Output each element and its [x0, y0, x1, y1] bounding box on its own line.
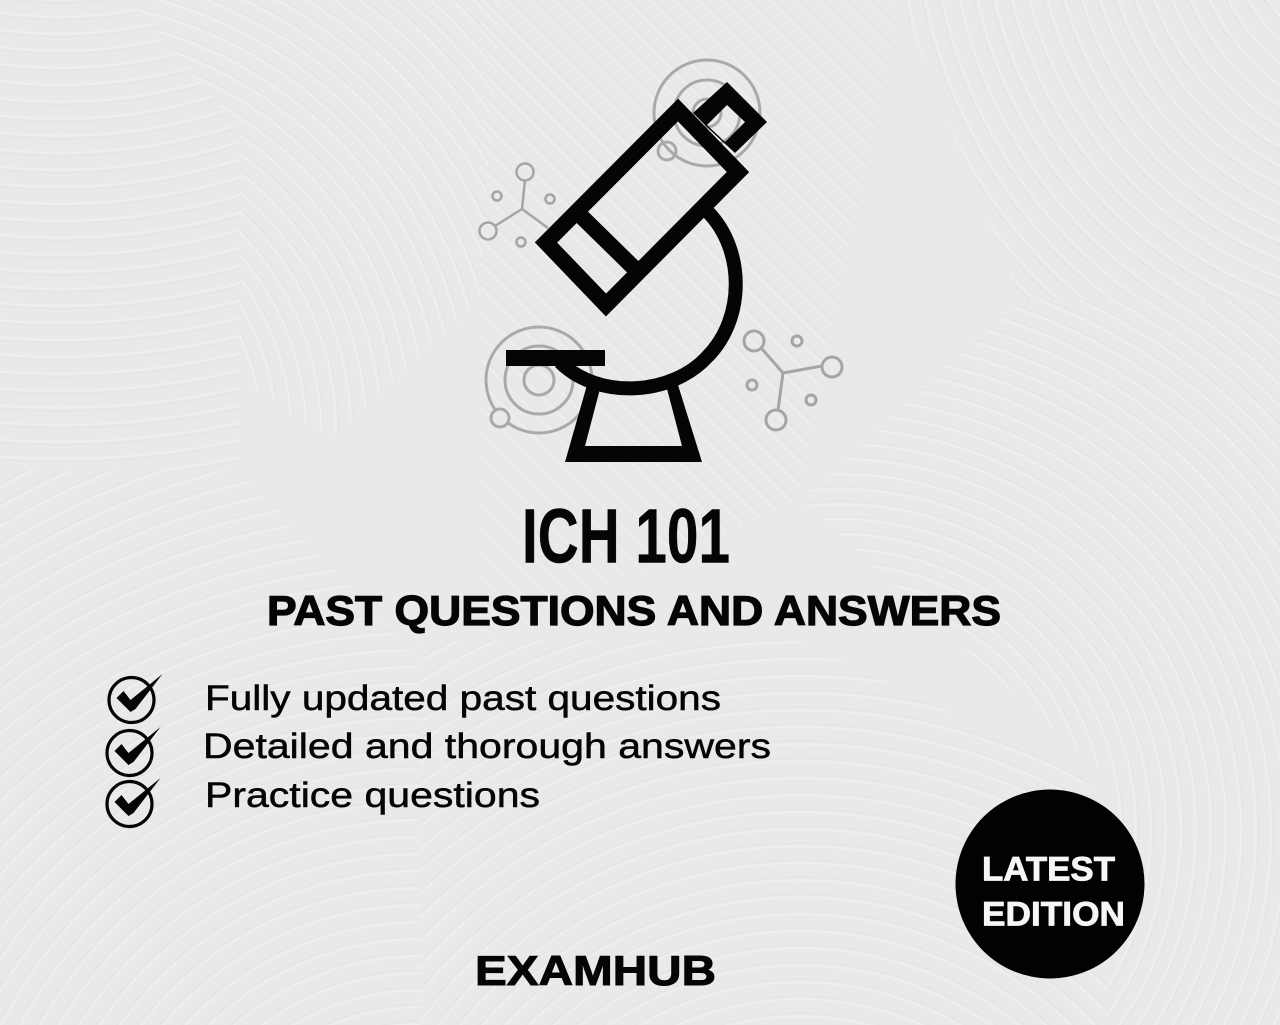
microscope tube: [546, 110, 738, 305]
brand name: EXAMHUB: [475, 947, 716, 994]
microscope base: [565, 385, 702, 462]
badge: latest edition: LATEST: [982, 850, 1115, 888]
badge: latest edition: EDITION: [982, 896, 1125, 934]
list item 1: Fully updated past questions: [205, 679, 721, 718]
decoration: top concentric rings: [654, 60, 760, 166]
decoration: right molecule: [744, 331, 842, 430]
icon: microscope with science decorations: [480, 60, 842, 462]
title: ICH 101: [522, 494, 730, 580]
icon: check 3: [107, 778, 160, 826]
list item 2: Detailed and thorough answers: [203, 727, 771, 766]
microscope stage: [506, 350, 605, 366]
badge: latest edition: [956, 790, 1144, 978]
icon: check 1: [109, 674, 162, 722]
decoration: bottom-left concentric rings: [486, 327, 592, 433]
icon: check 2: [107, 727, 160, 776]
checklist: [107, 674, 771, 826]
microscope arm: [560, 212, 736, 388]
decoration: left molecule: [480, 164, 554, 246]
list item 3: Practice questions: [205, 776, 540, 815]
microscope eyepiece: [693, 82, 767, 153]
subtitle: PAST QUESTIONS AND ANSWERS: [267, 587, 1001, 634]
